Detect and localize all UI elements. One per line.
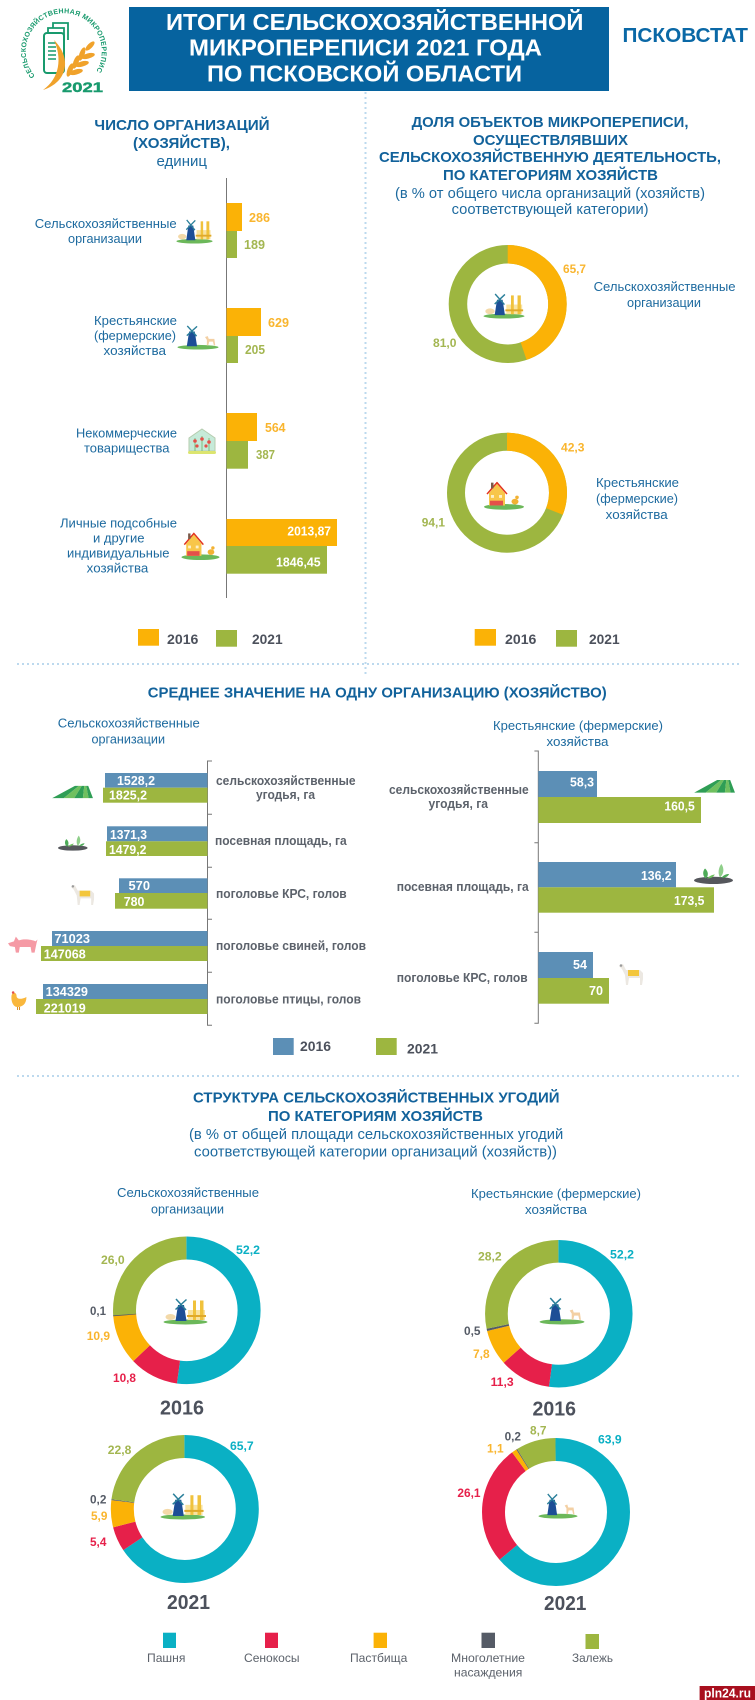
row: personal households: хозяйства [87, 561, 149, 576]
chart: agricultural organisations: 1371,3 [110, 828, 147, 842]
heading: land structure [189, 1089, 563, 1161]
legend: land categories: Сенокосы [244, 1651, 300, 1665]
row: personal households: индивидуальные [67, 546, 170, 561]
donut: farm households 2016: 28,2 [478, 1250, 502, 1264]
chart: farm households: Крестьянские (фермерские) [493, 718, 663, 733]
heading: land structure: соответствующей категории организаций (хозяйств)) [194, 1144, 557, 1161]
donut: farm households: (фермерские) [596, 491, 678, 506]
heading: share of active objects [379, 114, 721, 218]
chart: farm households: хозяйства [546, 734, 609, 749]
donut: agricultural organisations: Сельскохозяйственные [594, 279, 736, 294]
legend: land categories: насаждения [454, 1665, 522, 1679]
legend: years: 2016 [167, 631, 199, 647]
row: non-commercial partnerships [76, 413, 286, 469]
donut: agricultural organisations 2016 [87, 1243, 260, 1420]
heading: number of organisations: ЧИСЛО ОРГАНИЗАЦИЙ [94, 116, 270, 134]
donut: agricultural organisations 2016: 52,2 [236, 1243, 260, 1257]
donut: farm households 2016: 2016 [532, 1399, 576, 1421]
chart: agricultural organisations: поголовье свиней, голов [216, 939, 366, 953]
logo: agricultural microcensus 2021 [20, 8, 107, 95]
chart: agricultural organisations: сельскохозяйственные [216, 774, 356, 788]
legend: years [273, 1038, 438, 1056]
row: agricultural organisations: Сельскохозяйственные [35, 216, 177, 231]
donut: farm households 2016: 11,3 [491, 1375, 514, 1389]
donut: farm households [422, 441, 679, 544]
row: personal households: 1846,45 [276, 556, 321, 570]
donut: farm households 2021: 63,9 [598, 1432, 622, 1446]
row: non-commercial partnerships: 387 [256, 448, 275, 462]
chart: agricultural organisations: 134329 [46, 985, 88, 999]
donut: farm households: хозяйства [606, 507, 668, 522]
donut: agricultural organisations 2021: 0,2 [90, 1493, 107, 1507]
chart: farm households: 70 [589, 984, 603, 998]
chart: agricultural organisations: посевная площадь, га [215, 834, 348, 848]
chart: farm households: сельскохозяйственные [389, 783, 529, 797]
row: farm households: 629 [268, 316, 289, 330]
donut: farm households 2021: 8,7 [530, 1424, 547, 1438]
legend: years: 2021 [589, 631, 620, 647]
legend: years [138, 629, 283, 647]
legend: years: 2016 [505, 631, 537, 647]
legend: years: 2016 [300, 1038, 331, 1054]
chart: agricultural organisations: 1528,2 [117, 774, 155, 788]
row: non-commercial partnerships: товарищества [84, 441, 170, 456]
row: agricultural organisations: 286 [249, 211, 270, 225]
chart: agricultural organisations: 147068 [44, 947, 86, 961]
donut: farm households 2021: 26,1 [457, 1486, 481, 1500]
donut: farm households 2016: 52,2 [610, 1247, 634, 1261]
heading: share of active objects: ПО КАТЕГОРИЯМ ХОЗЯЙСТВ [443, 166, 658, 184]
heading: number of organisations: (ХОЗЯЙСТВ), [133, 134, 230, 152]
donut: farm households 2021 [457, 1424, 622, 1615]
agency name: ПСКОВСТАТ [622, 24, 748, 47]
legend: years [475, 629, 620, 647]
donut: farm households 2021: 2021 [544, 1593, 586, 1615]
subheading: farm households [471, 1186, 641, 1217]
subheading: agricultural organisations [117, 1185, 259, 1216]
donut: agricultural organisations 2021: 5,4 [90, 1535, 107, 1549]
donut: agricultural organisations 2016: 2016 [160, 1398, 204, 1420]
chart: agricultural organisations: угодья, га [256, 788, 316, 802]
donut: farm households 2016: 0,5 [464, 1324, 481, 1338]
chart: farm households: поголовье КРС, голов [397, 971, 528, 985]
row: farm households: Крестьянские [94, 313, 177, 328]
chart: farm households: 160,5 [664, 800, 695, 814]
chart: farm households [389, 718, 735, 1023]
donut: farm households: 42,3 [561, 441, 585, 455]
heading: land structure: СТРУКТУРА СЕЛЬСКОХОЗЯЙСТВЕННЫХ УГОДИЙ [193, 1089, 560, 1107]
legend: land categories [147, 1633, 613, 1679]
subheading: farm households: Крестьянские (фермерские) [471, 1186, 641, 1201]
subheading: agricultural organisations: Сельскохозяйственные [117, 1185, 259, 1200]
row: non-commercial partnerships: Некоммерческие [76, 426, 177, 441]
title banner: МИКРОПЕРЕПИСИ 2021 ГОДА [189, 35, 542, 61]
heading: share of active objects: СЕЛЬСКОХОЗЯЙСТВЕННУЮ ДЕЯТЕЛЬНОСТЬ, [379, 148, 721, 166]
title banner [129, 7, 609, 91]
chart: agricultural organisations: 221019 [44, 1001, 86, 1015]
donut: agricultural organisations 2016: 10,9 [87, 1329, 110, 1343]
legend: years: 2021 [407, 1040, 438, 1056]
donut: agricultural organisations 2016: 10,8 [113, 1371, 136, 1385]
donut: farm households: Крестьянские [596, 475, 679, 490]
chart: agricultural organisations: поголовье КРС, голов [216, 887, 347, 901]
donut: agricultural organisations [433, 254, 736, 354]
donut: agricultural organisations 2021: 2021 [167, 1592, 210, 1614]
chart: farm households: угодья, га [428, 797, 489, 811]
donut: agricultural organisations 2016: 0,1 [90, 1304, 106, 1318]
row: personal households: 2013,87 [287, 525, 331, 539]
donut: farm households 2016 [464, 1247, 634, 1421]
donut: agricultural organisations 2016: 26,0 [101, 1253, 125, 1267]
legend: land categories: Пашня [147, 1651, 185, 1665]
heading: number of organisations [94, 116, 270, 170]
row: agricultural organisations [35, 203, 270, 258]
donut: agricultural organisations 2021: 22,8 [108, 1443, 132, 1457]
legend: land categories: Пастбища [350, 1651, 408, 1665]
heading: share of active objects: (в % от общего числа организаций (хозяйств) [395, 185, 705, 202]
donut: agricultural organisations: организации [627, 295, 701, 310]
donut: agricultural organisations 2021 [90, 1439, 254, 1614]
donut: farm households 2021: 0,2 [505, 1430, 521, 1444]
donut: agricultural organisations: 81,0 [433, 336, 457, 350]
panel: share of active objects [379, 114, 736, 647]
legend: years: 2021 [252, 631, 283, 647]
subheading: farm households: хозяйства [525, 1202, 588, 1217]
panel: number of organisations [35, 116, 337, 647]
donut: agricultural organisations 2021: 5,9 [91, 1509, 108, 1523]
subheading: agricultural organisations: организации [151, 1201, 224, 1216]
row: farm households: 205 [245, 343, 265, 357]
row: agricultural organisations: организации [68, 231, 142, 246]
row: personal households: и другие [93, 531, 144, 546]
row: personal households: Личные подсобные [60, 516, 177, 531]
row: personal households [60, 516, 337, 576]
chart: farm households: 173,5 [674, 894, 704, 908]
chart: agricultural organisations: Сельскохозяйственные [58, 715, 200, 730]
chart: agricultural organisations: организации [92, 731, 165, 746]
row: farm households: (фермерские) [94, 328, 176, 343]
row: agricultural organisations: 189 [244, 238, 265, 252]
legend: land categories: Залежь [572, 1651, 613, 1665]
chart: farm households: посевная площадь, га [397, 880, 530, 894]
legend: land categories: Многолетние [451, 1651, 525, 1665]
bar chart axis [226, 178, 227, 598]
heading: land structure: (в % от общей площади сельскохозяйственных угодий [189, 1126, 563, 1143]
chart: agricultural organisations: 1825,2 [109, 788, 147, 802]
chart: agricultural organisations: 71023 [54, 932, 90, 946]
heading: average per organisation: СРЕДНЕЕ ЗНАЧЕНИЕ НА ОДНУ ОРГАНИЗАЦИЮ (ХОЗЯЙСТВО) [148, 684, 607, 702]
row: farm households: хозяйства [104, 343, 167, 358]
donut: farm households 2016: 7,8 [473, 1347, 490, 1361]
chart: farm households: 136,2 [641, 869, 672, 883]
chart: agricultural organisations [8, 715, 366, 1025]
panel: average per organisation [8, 684, 735, 1056]
chart: agricultural organisations: 780 [124, 895, 144, 909]
donut: agricultural organisations: 65,7 [563, 262, 586, 276]
chart: farm households: 58,3 [570, 776, 594, 790]
title banner: ПО ПСКОВСКОЙ ОБЛАСТИ [207, 60, 522, 87]
donut: agricultural organisations 2021: 65,7 [230, 1439, 254, 1453]
chart: farm households: 54 [573, 958, 587, 972]
logo: agricultural microcensus 2021: 2021 [62, 80, 104, 95]
heading: share of active objects: ОСУЩЕСТВЛЯВШИХ [473, 132, 628, 149]
title banner: ИТОГИ СЕЛЬСКОХОЗЯЙСТВЕННОЙ [166, 8, 584, 35]
heading: share of active objects: соответствующей категории) [452, 201, 649, 218]
row: non-commercial partnerships: 564 [265, 421, 286, 435]
chart: agricultural organisations: 570 [128, 879, 150, 893]
row: farm households [94, 308, 289, 363]
chart: agricultural organisations: поголовье птицы, голов [216, 992, 361, 1006]
donut: farm households 2021: 1,1 [487, 1441, 504, 1455]
heading: share of active objects: ДОЛЯ ОБЪЕКТОВ МИКРОПЕРЕПИСИ, [412, 114, 688, 131]
panel: land structure [87, 1089, 641, 1679]
donut: farm households: 94,1 [422, 516, 445, 530]
heading: number of organisations: единиц [156, 153, 207, 170]
chart: agricultural organisations: 1479,2 [109, 843, 146, 857]
heading: land structure: ПО КАТЕГОРИЯМ ХОЗЯЙСТВ [268, 1107, 483, 1125]
